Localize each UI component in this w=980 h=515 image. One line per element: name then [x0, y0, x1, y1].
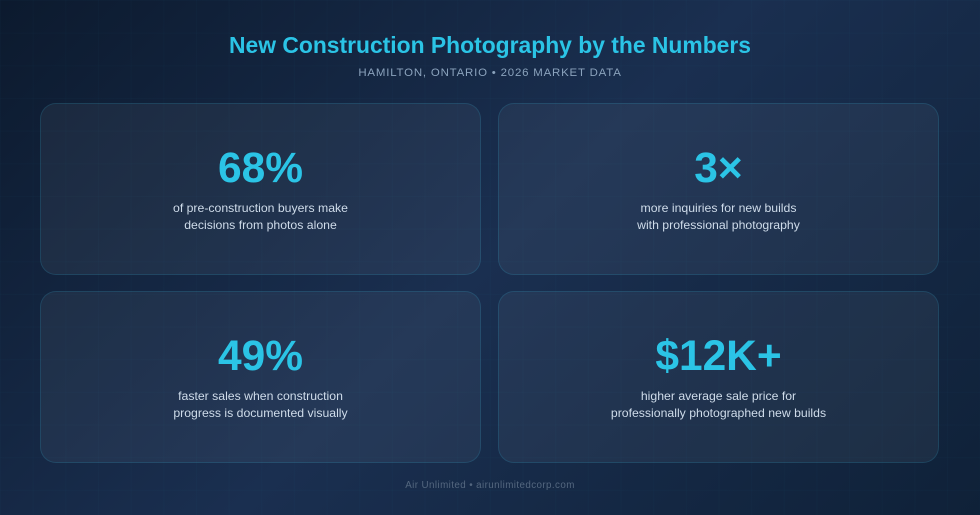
- stat description: faster sales: faster sales when construction: [178, 388, 343, 402]
- subtitle: HAMILTON, ONTARIO • 2026 MARKET DATA: [358, 67, 622, 79]
- stat description: buyers: of pre-construction buyers make: [173, 200, 348, 214]
- stat description: inquiries: [637, 200, 800, 232]
- panel: $12K+ stat: [498, 291, 939, 463]
- stat description: faster sales: [173, 388, 348, 420]
- stat description: sale price: higher average sale price for: [641, 388, 796, 402]
- stat number: 49%: 49%: [218, 332, 303, 379]
- stat description: faster sales: progress is documented visually: [173, 406, 348, 420]
- stat description: inquiries: more inquiries for new builds: [641, 200, 796, 214]
- stat description: sale price: [611, 388, 826, 420]
- panel: 3x stat: [498, 103, 939, 275]
- stat description: buyers: [173, 200, 348, 232]
- stat number: 68%: 68%: [218, 144, 303, 191]
- title: New Construction Photography by the Numbers: [229, 32, 751, 58]
- stat number: $12K+: $12K+: [655, 332, 782, 379]
- panel: 68% stat: [40, 103, 481, 275]
- panel: 49% stat: [40, 291, 481, 463]
- stat number: 3x: 3×: [694, 144, 743, 191]
- stat description: sale price: professionally photographed new builds: [611, 406, 826, 420]
- footer: Air Unlimited • airunlimitedcorp.com: [405, 480, 575, 491]
- stat description: buyers: decisions from photos alone: [184, 218, 337, 232]
- stat description: inquiries: with professional photography: [637, 218, 800, 232]
